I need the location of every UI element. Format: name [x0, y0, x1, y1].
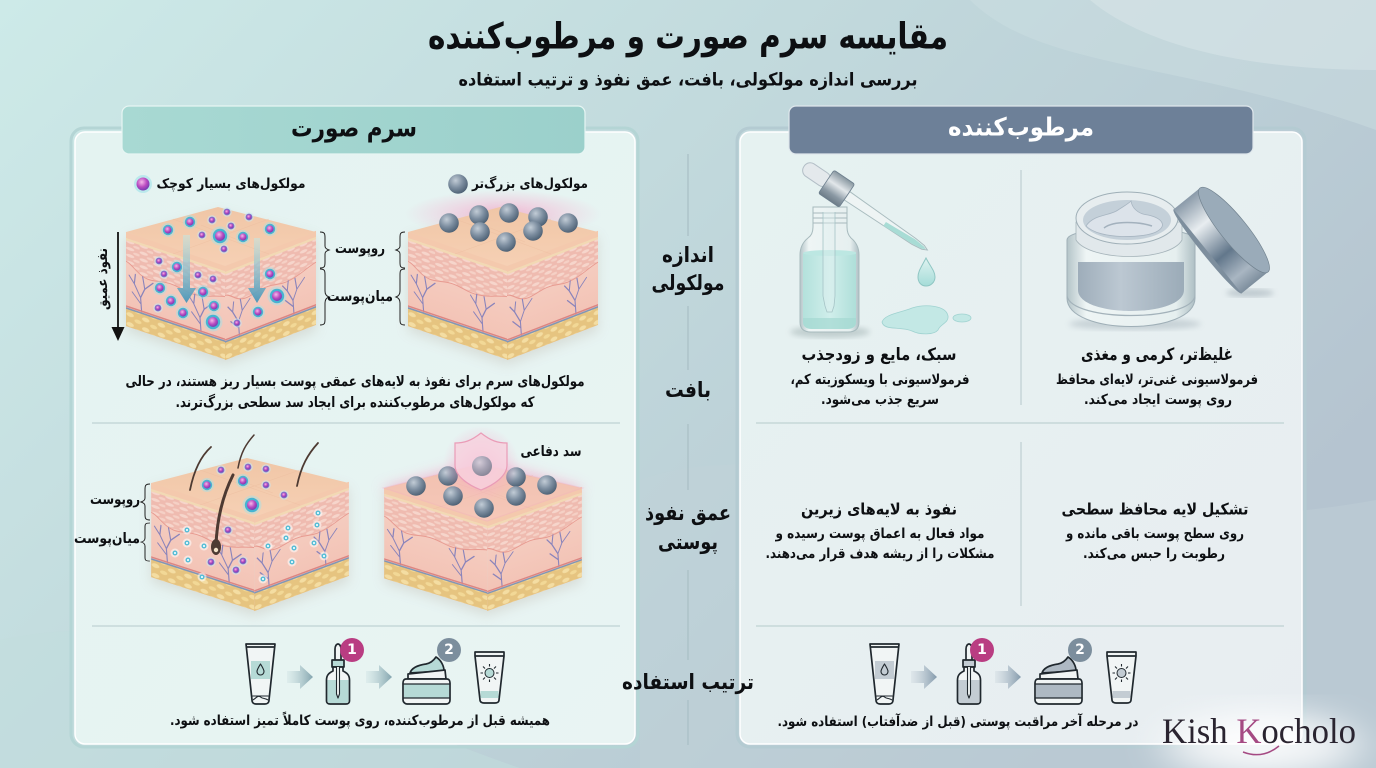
- icon: moisturizer jar: [403, 657, 450, 704]
- illustration: droplet: [918, 258, 935, 286]
- logo: Kish Kocholo: [1162, 711, 1356, 751]
- icon: serum dropper: [958, 644, 980, 704]
- panel: moisturizer: [737, 106, 1305, 747]
- step badge 2: 2: [1075, 642, 1085, 658]
- label: epidermis: روپوست: [335, 241, 385, 257]
- step badge 2: [437, 638, 461, 662]
- text: serum texture: فرمولاسیونی با ویسکوزیته کم،: [790, 372, 970, 388]
- epidermis and dermis braces: lower left: [141, 484, 150, 561]
- center label: penetration depth: [645, 501, 731, 554]
- explanatory paragraph: serum: که مولکول‌های مرطوب‌کننده برای ایجاد سد سطحی بزرگ‌ترند.: [176, 394, 535, 411]
- text: cream texture: غلیظ‌تر، کرمی و مغذی: [1081, 345, 1233, 365]
- explanatory paragraph: serum: مولکول‌های سرم برای نفوذ به لایه‌های عمقی پوست بسیار ریز هستند، در حالی: [126, 374, 584, 390]
- serum header: سرم صورت: [291, 114, 417, 144]
- label: dermis lower: میان‌پوست: [74, 531, 140, 547]
- routine steps: serum: [246, 638, 504, 704]
- arrow: [911, 665, 937, 689]
- text: cream texture: [1056, 345, 1258, 408]
- illustration: jar lid: [1170, 180, 1278, 297]
- arrow: [995, 665, 1021, 689]
- deep molecules: [153, 256, 286, 332]
- arrow: [287, 665, 313, 689]
- icon: sunscreen tube: [475, 652, 504, 703]
- illustration: cream jar: [1067, 180, 1278, 330]
- routine text: serum: همیشه قبل از مرطوب‌کننده، روی پوست کاملاً تمیز استفاده شود.: [170, 711, 550, 729]
- text: serum texture: [790, 345, 970, 408]
- text: surface protective layer: رطوبت را حبس می‌کند.: [1083, 546, 1225, 562]
- subtitle: بررسی اندازه مولکولی، بافت، عمق نفوذ و ترتیب استفاده: [458, 70, 918, 90]
- text: deep layers: مواد فعال به اعماق پوست رسیده و: [775, 526, 984, 542]
- center label: order of use: ترتیب استفاده: [622, 670, 754, 694]
- icon: serum dropper: [326, 644, 350, 704]
- deep penetration arrow: [95, 232, 124, 341]
- text: deep layers: مشکلات را از ریشه هدف قرار می‌دهند.: [766, 546, 994, 562]
- icon: cleanser tube: [870, 644, 899, 704]
- step badge 1: [970, 638, 994, 662]
- downward arrows: [177, 235, 266, 303]
- skin block: deep penetration: [151, 435, 349, 616]
- label: dermis: میان‌پوست: [327, 289, 393, 305]
- skin block: barrier: [380, 458, 586, 616]
- icon: cleanser tube: [246, 644, 275, 704]
- panel: serum: [71, 106, 638, 747]
- surface molecules: [161, 207, 277, 254]
- text: deep layers: نفوذ به لایه‌های زیرین: [801, 500, 957, 518]
- center label: molecular size: [652, 243, 724, 295]
- step badge 1: 1: [347, 642, 357, 658]
- center label: texture: بافت: [665, 378, 711, 402]
- label: epidermis lower: روپوست: [90, 492, 140, 508]
- illustration: puddle: [882, 306, 948, 334]
- step badge 2: 2: [444, 642, 454, 658]
- icon: moisturizer jar: [1035, 657, 1082, 704]
- text: deep layers: [766, 500, 994, 562]
- serum header: [122, 106, 585, 154]
- text: surface protective layer: روی سطح پوست باقی مانده و: [1065, 526, 1244, 542]
- text: cream texture: روی پوست ایجاد می‌کند.: [1084, 392, 1232, 408]
- label: barrier: سد دفاعی: [520, 444, 582, 460]
- epidermis and dermis braces: moisturizer block: [396, 232, 405, 325]
- skin block: large molecules: [405, 190, 601, 365]
- text: serum texture: سبک، مایع و زودجذب: [802, 345, 956, 365]
- text: serum texture: سریع جذب می‌شود.: [821, 392, 939, 408]
- deep molecules: [170, 508, 328, 584]
- step badge 1: [340, 638, 364, 662]
- title: مقایسه سرم صورت و مرطوب‌کننده: [428, 16, 948, 58]
- routine text: moisturizer: در مرحله آخر مراقبت پوستی (قبل از ضدآفتاب) استفاده شود.: [778, 713, 1139, 730]
- illustration: serum bottle: [790, 155, 971, 338]
- illustration: dropper: [796, 155, 935, 262]
- deep penetration arrow: نفوذ عمیق: [95, 248, 111, 310]
- explanatory paragraph: serum: [126, 374, 584, 411]
- center label: molecular size: مولکولی: [652, 271, 724, 295]
- arrow: [366, 665, 392, 689]
- moisturizer header: مرطوب‌کننده: [948, 112, 1094, 142]
- icon: sunscreen tube: [1107, 652, 1136, 703]
- skin block: serum molecules: [126, 207, 316, 365]
- text: surface protective layer: [1062, 500, 1248, 562]
- epidermis and dermis braces: serum block: [320, 232, 329, 325]
- step badge 2: [1068, 638, 1092, 662]
- text: surface protective layer: تشکیل لایه محافظ سطحی: [1062, 500, 1248, 518]
- surface spheres: [406, 466, 557, 518]
- hairs: [190, 435, 318, 555]
- step badge 1: 1: [977, 642, 987, 658]
- legend: small molecules: مولکول‌های بسیار کوچک: [156, 176, 306, 192]
- routine steps: moisturizer: [870, 638, 1136, 704]
- legend: large molecules: مولکول‌های بزرگ‌تر: [471, 176, 588, 192]
- center label: penetration depth: عمق نفوذ: [645, 501, 731, 525]
- surface spheres: [439, 203, 578, 252]
- moisturizer header: [789, 106, 1253, 154]
- barrier shield: [443, 426, 519, 502]
- surface molecules: [200, 462, 289, 514]
- text: cream texture: فرمولاسیونی غنی‌تر، لایه‌ای محافظ: [1056, 372, 1258, 388]
- center label: molecular size: اندازه: [662, 243, 714, 267]
- center label: penetration depth: پوستی: [658, 530, 718, 554]
- logo: [1140, 703, 1376, 768]
- legend: large molecules: [448, 174, 588, 194]
